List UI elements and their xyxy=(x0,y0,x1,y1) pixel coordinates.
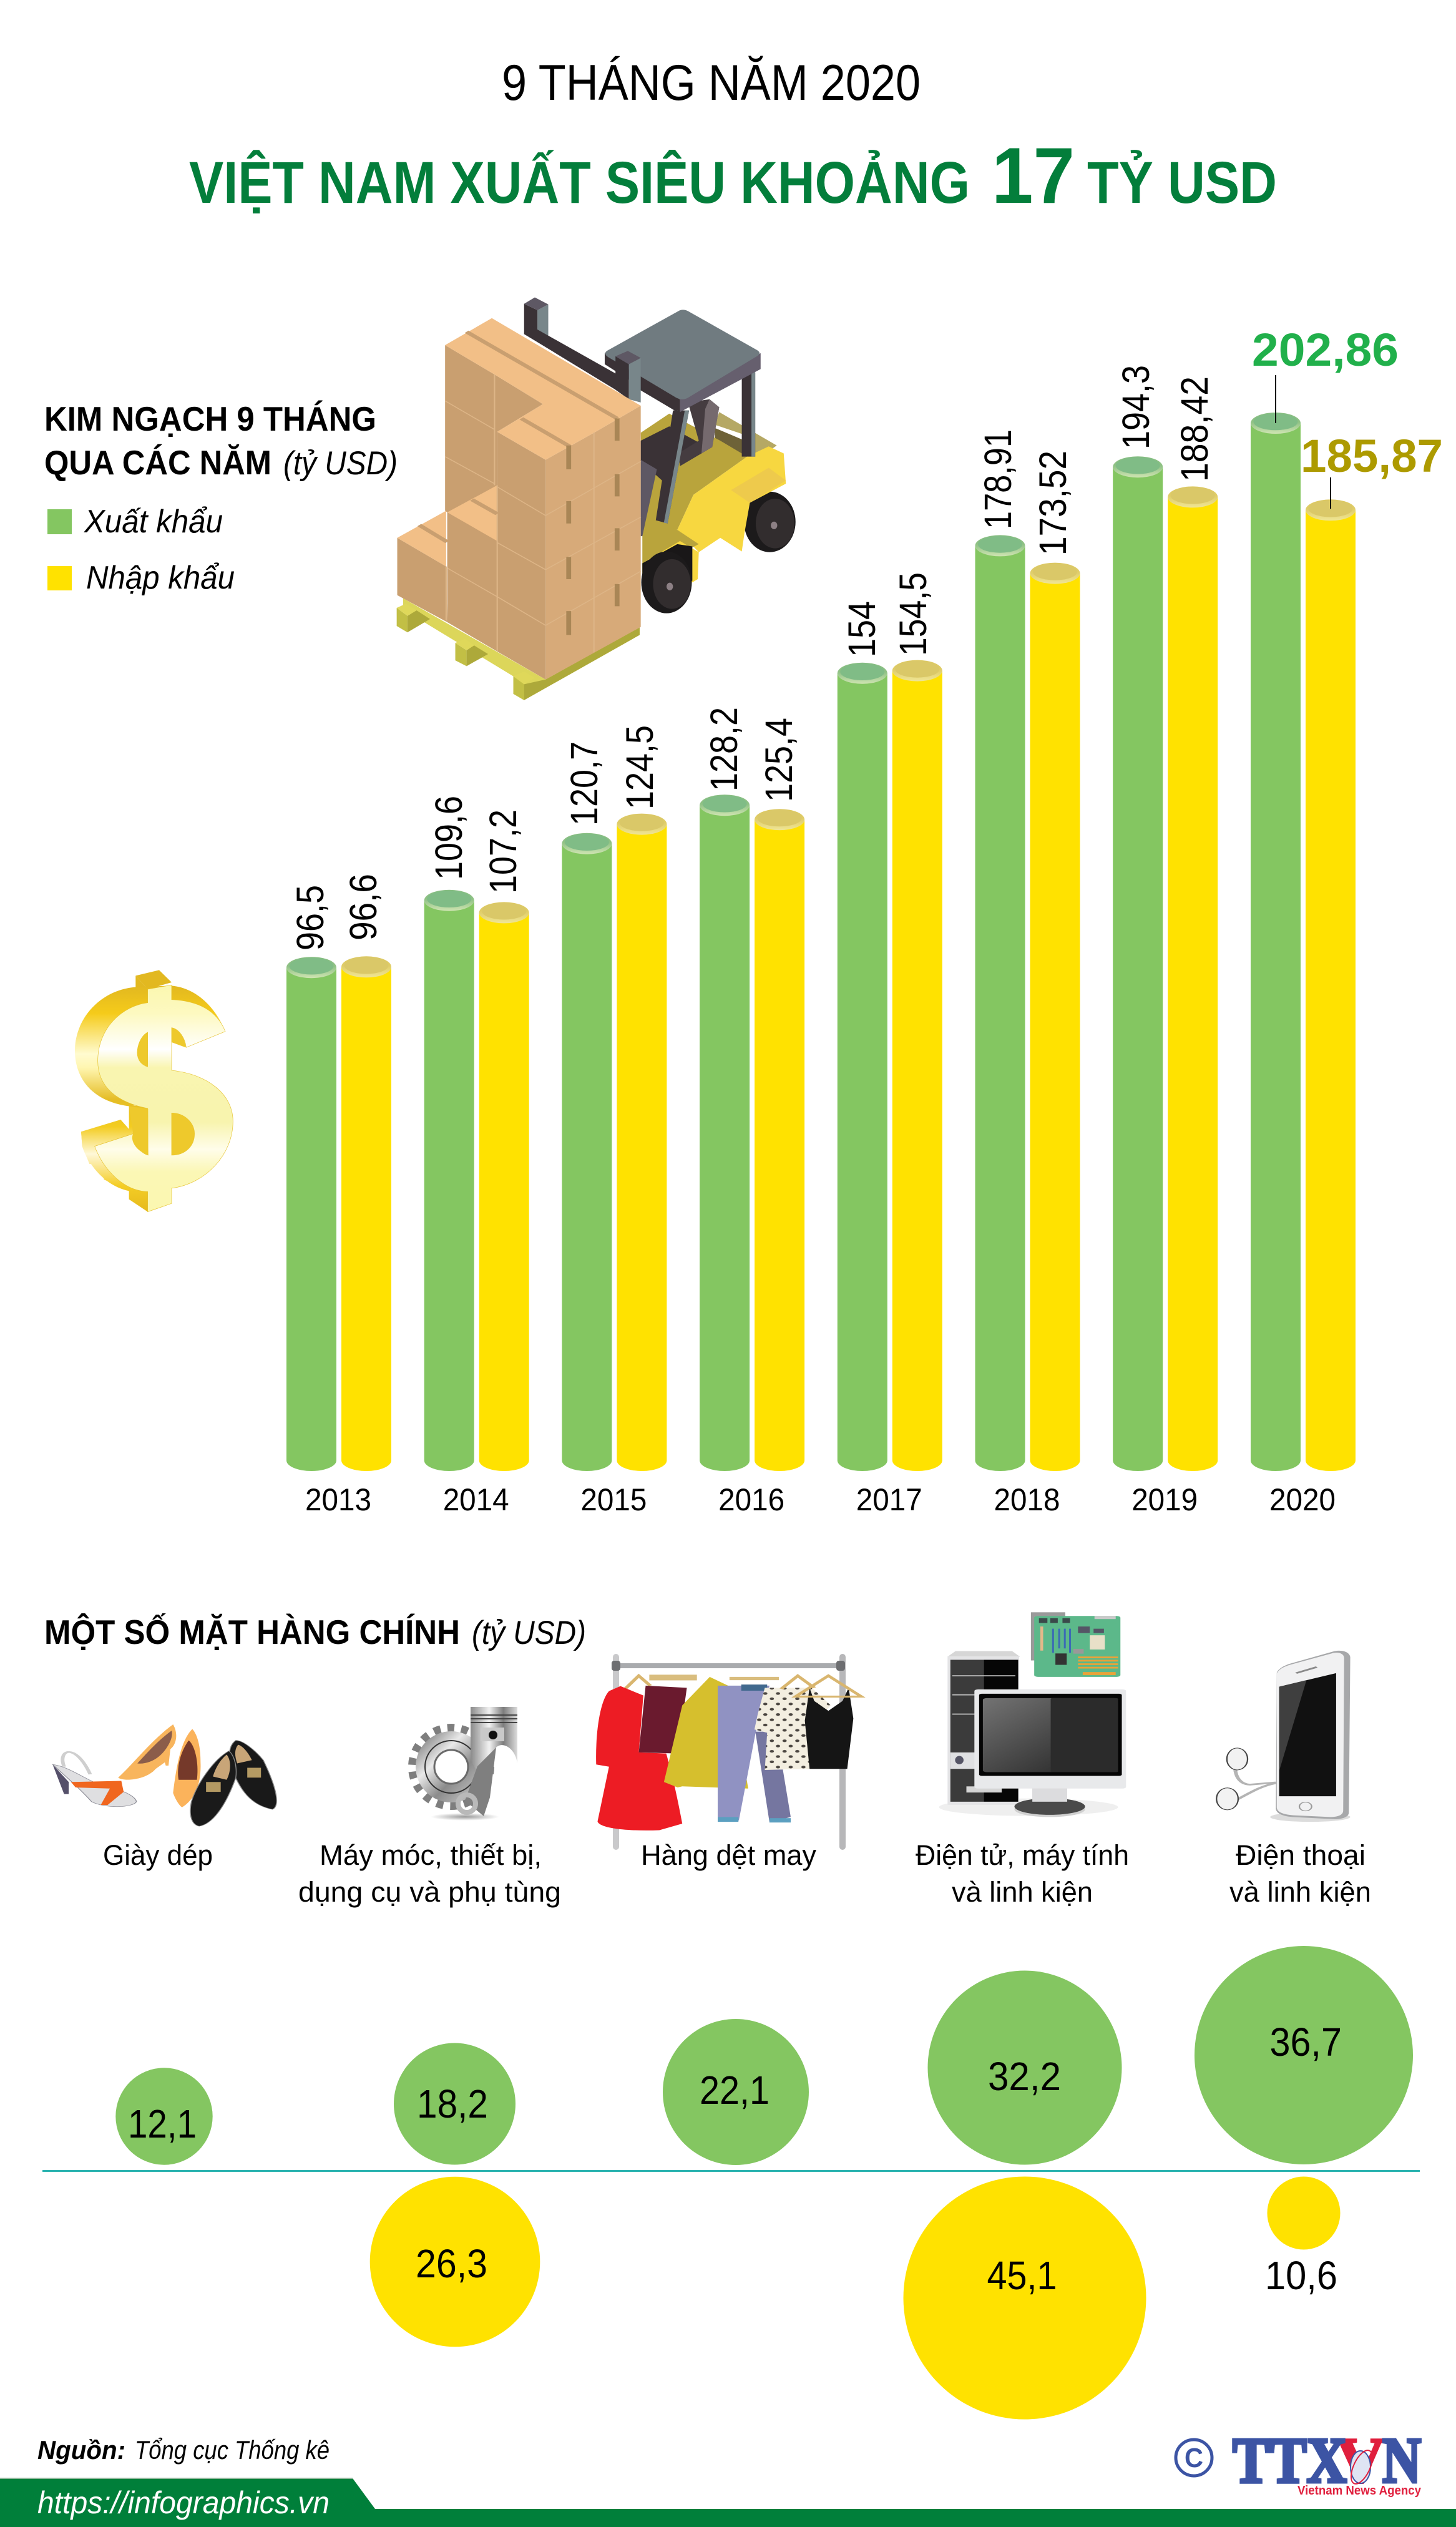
bubble: machinery export xyxy=(394,2043,515,2164)
2018 bars xyxy=(975,429,1080,1471)
bubble: textile export: 22,1 xyxy=(700,2068,770,2113)
bubble: phones export xyxy=(1195,1946,1413,2164)
copyright mark xyxy=(1176,2440,1212,2476)
pallet xyxy=(397,599,640,700)
bubble: machinery import xyxy=(370,2177,540,2347)
2017 bars: 154 xyxy=(841,601,883,657)
commodity labels: dụng cụ và phụ tùng xyxy=(298,1876,561,1908)
legend heading xyxy=(44,399,398,482)
bubble: footwear export xyxy=(115,2068,213,2165)
icon: forklift with boxes xyxy=(397,298,796,700)
2015 bars: 124,5 xyxy=(618,725,661,809)
section heading: main commodities: MỘT SỐ MẶT HÀNG CHÍNH xyxy=(44,1613,460,1651)
2016 bars xyxy=(700,707,804,1471)
motherboard xyxy=(1031,1612,1120,1677)
source note: Tổng cục Thống kê xyxy=(135,2435,330,2465)
bubble: electronics export: 32,2 xyxy=(988,2054,1061,2099)
logo: TTXVN xyxy=(1176,2425,1422,2498)
icon: gold dollar sign xyxy=(75,970,233,1212)
tower xyxy=(939,1651,1118,1816)
bubble: electronics import: 45,1 xyxy=(987,2253,1057,2298)
year axis labels: 2013 xyxy=(305,1482,371,1517)
roof posts xyxy=(640,372,755,524)
mast and forks xyxy=(524,298,657,536)
2017 bars xyxy=(838,572,942,1471)
bubble: machinery export: 18,2 xyxy=(417,2081,488,2126)
2019 bars: 188,42 xyxy=(1173,376,1216,482)
bubble: phones import xyxy=(1265,2177,1341,2298)
2015 bars: 120,7 xyxy=(563,741,605,826)
piston xyxy=(458,1707,517,1816)
legend panel xyxy=(44,399,398,596)
2014 bars xyxy=(424,796,529,1471)
agency wordmark: TTX xyxy=(1233,2425,1347,2496)
bubble: electronics export xyxy=(927,1971,1122,2164)
icon: gear and piston xyxy=(413,1707,517,1821)
year axis labels: 2018 xyxy=(994,1482,1060,1517)
commodity labels: Giày dép xyxy=(103,1839,213,1871)
legend heading: (tỷ USD) xyxy=(283,445,398,482)
2014 bars: 107,2 xyxy=(482,809,524,894)
bubble: machinery import: 26,3 xyxy=(416,2241,487,2286)
forklift body xyxy=(641,412,786,582)
legend heading: KIM NGẠCH 9 THÁNG xyxy=(44,399,376,438)
title line 2: TỶ USD xyxy=(1087,150,1277,216)
icon: smartphone and earphones xyxy=(1216,1651,1351,1822)
title line 2 xyxy=(189,131,1277,220)
source note xyxy=(37,2435,330,2465)
2020 bars with callouts: 185,87 xyxy=(1301,430,1443,482)
2016 bars: 125,4 xyxy=(758,718,800,802)
commodity labels: và linh kiện xyxy=(1229,1876,1371,1908)
2013 bars: 96,6 xyxy=(342,874,384,941)
stacked boxes xyxy=(398,318,641,680)
2016 bars: 128,2 xyxy=(703,707,745,791)
2014 bars: 109,6 xyxy=(428,796,470,880)
year axis labels: 2016 xyxy=(718,1482,784,1517)
footer band with url: https://infographics.vn xyxy=(37,2485,330,2520)
bar chart: export and import 2013-2020 xyxy=(286,324,1443,1517)
legend item: export: Xuất khẩu xyxy=(84,504,223,540)
bubble: electronics import xyxy=(904,2177,1146,2419)
2018 bars: 178,91 xyxy=(977,429,1019,529)
bubble: footwear export: 12,1 xyxy=(128,2101,197,2146)
front wheel xyxy=(642,552,691,613)
commodity labels: Máy móc, thiết bị, xyxy=(320,1839,542,1871)
title xyxy=(189,55,1277,220)
dollar front face xyxy=(95,985,233,1212)
2018 bars: 173,52 xyxy=(1032,451,1074,555)
2017 bars: 154,5 xyxy=(892,572,934,656)
commodity labels xyxy=(103,1839,1371,1908)
bubble: phones import: 10,6 xyxy=(1265,2253,1337,2298)
bubble: textile export xyxy=(663,2019,809,2165)
copyright mark: C xyxy=(1185,2443,1203,2473)
2020 bars with callouts xyxy=(1251,324,1443,1471)
legend heading: QUA CÁC NĂM xyxy=(44,443,271,482)
year axis labels: 2015 xyxy=(580,1482,647,1517)
commodity labels: và linh kiện xyxy=(952,1876,1093,1908)
left garments xyxy=(596,1674,748,1830)
year axis labels: 2017 xyxy=(856,1482,922,1517)
commodity labels: Điện thoại xyxy=(1236,1839,1366,1871)
section heading: main commodities: (tỷ USD) xyxy=(472,1615,586,1651)
icon: clothes rack xyxy=(596,1654,861,1850)
icon: computer and motherboard xyxy=(939,1612,1126,1817)
2020 bars with callouts: 202,86 xyxy=(1252,324,1399,376)
source note: Nguồn: xyxy=(37,2435,125,2465)
2013 bars: 96,5 xyxy=(289,885,331,951)
year axis labels xyxy=(305,1482,1336,1517)
2015 bars xyxy=(562,725,667,1471)
rack poles and bar xyxy=(612,1654,846,1850)
seat xyxy=(641,399,719,482)
agency wordmark: N xyxy=(1382,2425,1421,2496)
title line 1: 9 THÁNG NĂM 2020 xyxy=(502,55,921,111)
bubble: phones export: 36,7 xyxy=(1269,2020,1342,2065)
2019 bars xyxy=(1113,365,1218,1471)
2019 bars: 194,3 xyxy=(1115,365,1157,449)
2013 bars xyxy=(286,874,391,1471)
roof xyxy=(605,310,761,412)
agency wordmark: V xyxy=(1336,2425,1385,2496)
footer band with url xyxy=(0,2478,1456,2527)
commodity labels: Hàng dệt may xyxy=(641,1839,816,1871)
bubble chart: commodities export and import xyxy=(42,1946,1420,2419)
title line 2: VIỆT NAM XUẤT SIÊU KHOẢNG xyxy=(189,149,970,216)
dollar extrusion xyxy=(75,970,225,1212)
title line 2: 17 xyxy=(992,131,1075,220)
monitor xyxy=(974,1689,1126,1817)
icon: shoes xyxy=(52,1724,276,1826)
commodity labels: Điện tử, máy tính xyxy=(916,1839,1129,1871)
dollar counter shading xyxy=(129,1028,195,1155)
earphones xyxy=(1216,1748,1276,1810)
year axis labels: 2020 xyxy=(1269,1482,1336,1517)
year axis labels: 2019 xyxy=(1131,1482,1198,1517)
rear wheel xyxy=(744,492,796,552)
legend item: import: Nhập khẩu xyxy=(86,560,235,596)
agency tagline: Vietnam News Agency xyxy=(1297,2484,1422,2498)
year axis labels: 2014 xyxy=(443,1482,509,1517)
right garments xyxy=(718,1676,861,1822)
